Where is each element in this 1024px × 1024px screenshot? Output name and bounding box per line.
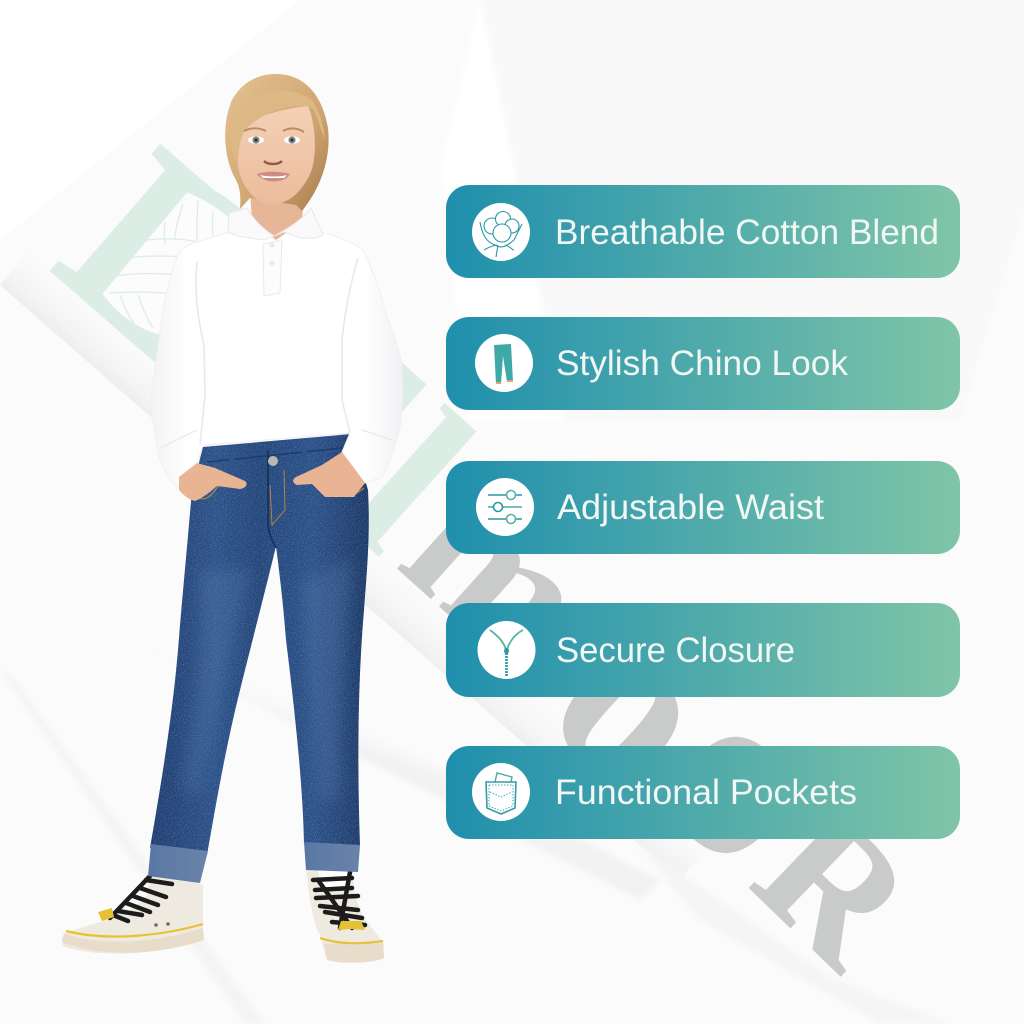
hands in pockets [179,452,365,501]
panel: functional pockets [446,746,960,839]
label: Adjustable Waist [557,488,824,527]
hair fringe [229,90,325,165]
left shoe [62,876,204,954]
icon: cotton boll [472,203,530,261]
boy in white polo shirt and blue jeans [62,74,402,963]
watermark: leaf inside E [94,184,248,356]
watermark: grey letters: o [504,562,771,840]
watermark: green letters: l [252,320,467,550]
label: Secure Closure [556,631,795,670]
panel: secure closure [446,603,960,697]
icon: zipper [478,621,536,679]
watermark: grey letters: o [614,637,881,915]
jeans rolled cuffs [148,842,360,883]
watermark: grey letters [364,433,952,1004]
white polo shirt [151,232,402,488]
polo collar and placket [228,208,323,296]
panel: adjustable waist [446,461,960,554]
face features [244,128,304,182]
watermark: green letters: l [302,367,517,597]
neck [250,190,304,240]
panel: stylish chino look [446,317,960,410]
icon: chino trousers [475,334,533,392]
watermark: grey letters: R [720,771,952,1004]
label: Stylish Chino Look [556,344,848,383]
watermark: green letters: E [14,100,321,419]
face [236,106,315,204]
right shoe [306,868,384,963]
jeans [150,434,369,855]
label: Functional Pockets [555,773,857,812]
label: Breathable Cotton Blend [555,213,939,252]
watermark: green letters [14,100,517,597]
watermark: grey letters: m [364,433,635,709]
icon: pocket with wallet [472,763,530,821]
panel: breathable cotton blend [446,185,960,278]
hair back [225,74,329,211]
icon: slider controls [476,478,534,536]
